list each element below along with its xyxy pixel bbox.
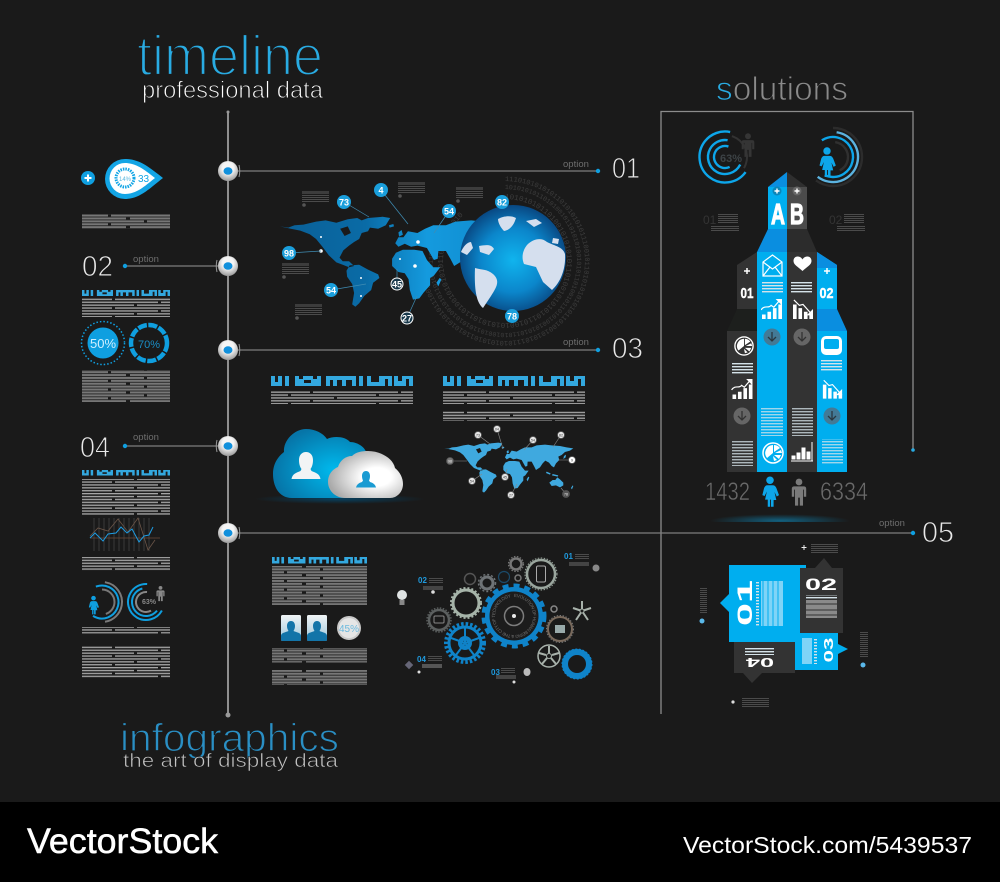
map pins with values: 73 xyxy=(339,198,349,208)
world map small: 73 xyxy=(476,434,480,438)
download arrows xyxy=(734,328,840,424)
step labels with option captions: 05 xyxy=(922,517,954,549)
binary rings around globe: 10101010110101001011010101001010110100101101010010101011010100101101010100101011010010110 xyxy=(428,184,582,338)
footer brand: VectorStock xyxy=(27,822,219,861)
map pins with values xyxy=(282,183,519,324)
step labels with option captions: 01 xyxy=(612,153,640,185)
box 01 xyxy=(720,565,806,642)
dial: top right woman xyxy=(804,128,862,186)
gears: gray xyxy=(427,556,591,667)
rocket text lines xyxy=(732,282,843,466)
line chart xyxy=(90,518,160,551)
gear step labels: 04 xyxy=(417,655,426,664)
stats: 1432 and 6334: 6334 xyxy=(820,478,868,506)
rocket wings and tapers xyxy=(727,229,847,331)
rocket nose A B: B xyxy=(790,199,804,231)
world map small: 98 xyxy=(448,460,452,464)
solutions frame xyxy=(661,112,915,714)
header block cloud xyxy=(271,376,413,386)
rocket columns xyxy=(727,252,847,472)
map captions xyxy=(282,182,483,320)
side captions 01 02: 01 xyxy=(703,213,717,227)
world map small: 54 xyxy=(470,480,474,484)
step labels with option captions xyxy=(80,153,954,549)
icon: envelope xyxy=(763,255,782,276)
text block 02 xyxy=(82,298,170,317)
donut: 70%: 70% xyxy=(138,339,160,351)
side captions 01 02 xyxy=(703,213,865,231)
text block 04 xyxy=(82,479,170,515)
side captions 01 02: 02 xyxy=(829,213,843,227)
option boxes xyxy=(700,543,868,707)
text block portraits xyxy=(272,566,367,605)
dial: top left 63%: 63% xyxy=(720,153,742,165)
world map small: 78 xyxy=(564,492,568,496)
stats: 1432 and 6334 xyxy=(705,476,868,507)
step labels with option captions: 04 xyxy=(80,432,110,464)
world map small xyxy=(444,426,576,498)
step labels with option captions: option xyxy=(879,518,905,529)
box 04: 04 xyxy=(746,655,774,669)
world map small: 82 xyxy=(559,434,563,438)
box 02 xyxy=(800,558,843,633)
binary rings around globe: 1110101010101101010101011100101101010101010110100101010111010101010110101010101110010110101 xyxy=(425,176,590,346)
box 03 xyxy=(795,633,848,670)
text block 04 middle xyxy=(82,557,170,571)
map pins with values: 54 xyxy=(326,286,336,296)
gears diagram xyxy=(397,552,600,684)
text block small map xyxy=(443,391,585,421)
step labels with option captions: option xyxy=(563,337,589,348)
world map small: 9 xyxy=(571,458,573,462)
donut: 50%: 50% xyxy=(90,336,116,351)
map pins with values: 54 xyxy=(444,206,454,216)
world map small: 04 xyxy=(495,428,499,432)
world map small: 54 xyxy=(531,438,535,442)
text block 04 caption xyxy=(82,627,170,634)
text block 02 lower xyxy=(82,370,170,402)
wing labels 01 02 xyxy=(740,268,834,302)
gear: blue spoked xyxy=(446,624,484,662)
title: timeline: timeline xyxy=(137,24,323,88)
wing labels 01 02: 01 xyxy=(740,285,754,302)
gear step labels: 01 xyxy=(564,552,573,561)
header block 04 xyxy=(82,470,170,476)
dial: 63% man xyxy=(121,577,171,627)
step labels with option captions: option xyxy=(133,432,159,443)
box 01: 01 xyxy=(734,579,757,626)
badge: plus and teardrop xyxy=(81,159,163,199)
rocket nose A B: A xyxy=(771,199,785,231)
donut: 50% xyxy=(82,322,124,364)
gear: blue ring xyxy=(562,650,592,678)
dial: 63% man: 63% xyxy=(142,599,157,606)
map pins with values: 98 xyxy=(284,248,294,258)
text block 04 bottom xyxy=(82,646,170,678)
gear step labels: 03 xyxy=(491,668,500,677)
text block cloud xyxy=(271,391,413,404)
timeline nodes xyxy=(216,161,240,543)
stats: 1432 and 6334: 1432 xyxy=(705,478,750,506)
box side captions xyxy=(700,543,868,707)
rocket nose A B xyxy=(768,172,807,231)
map pins with values: 78 xyxy=(507,312,517,322)
step labels with option captions: option xyxy=(563,159,589,170)
world map large xyxy=(280,217,525,307)
portrait icons and 45% xyxy=(281,615,361,641)
step labels with option captions: 02 xyxy=(82,251,113,283)
header block small map xyxy=(443,376,585,386)
binary rings around globe: 1010101011010010101010110100101010101101001010101011010010101010110100101010 xyxy=(438,194,572,328)
gear: central blue: EVOLUTION OF HUMAN BEING & THE CITY OF TECHNOLOGY xyxy=(492,594,536,638)
dial: woman xyxy=(79,579,125,625)
timeline vertical axis xyxy=(226,110,230,718)
text block portraits lower xyxy=(272,648,367,685)
world map small: 27 xyxy=(509,494,513,498)
text block: badge xyxy=(82,214,170,229)
map pins with values: 82 xyxy=(497,198,507,208)
portrait icons and 45%: 45% xyxy=(339,624,359,635)
subtitle: professional data: professional data xyxy=(142,77,324,104)
subtitle: the art of display data: the art of display data xyxy=(123,751,339,772)
heading: solutions: solutions xyxy=(716,70,848,107)
footer band xyxy=(0,802,1000,882)
step labels with option captions: 03 xyxy=(612,333,643,365)
dial: top left 63% xyxy=(689,121,761,193)
badge: plus and teardrop: 33 xyxy=(138,174,150,185)
box 04 xyxy=(734,642,795,683)
world map small: 45 xyxy=(503,476,507,480)
wing labels 01 02: 02 xyxy=(820,285,834,302)
box 02: 02 xyxy=(805,575,837,594)
globe xyxy=(460,205,566,311)
clouds xyxy=(255,429,425,504)
rocket chart xyxy=(727,172,847,472)
header block portraits xyxy=(272,557,367,564)
map pins with values: 4 xyxy=(378,186,384,196)
badge: plus and teardrop: 14% xyxy=(119,177,132,183)
footer url: VectorStock.com/5439537 xyxy=(683,832,972,858)
step labels with option captions: option xyxy=(133,254,159,265)
icon: light bulb xyxy=(397,590,407,605)
map pins with values: 45 xyxy=(392,280,402,290)
gear step labels: 02 xyxy=(418,576,427,585)
icon: heart xyxy=(794,256,812,271)
map pins with values: 27 xyxy=(402,314,412,324)
header block 02 xyxy=(82,290,170,296)
box 03: 03 xyxy=(821,638,836,662)
icon: screen xyxy=(821,336,842,355)
gear step labels xyxy=(405,552,600,684)
timeline connector lines xyxy=(123,169,915,535)
donut: 70% xyxy=(131,325,167,361)
rocket chart icons xyxy=(732,299,842,463)
reflection glow xyxy=(710,509,850,522)
title: infographics: infographics xyxy=(120,717,339,760)
gear: central blue xyxy=(482,584,546,648)
